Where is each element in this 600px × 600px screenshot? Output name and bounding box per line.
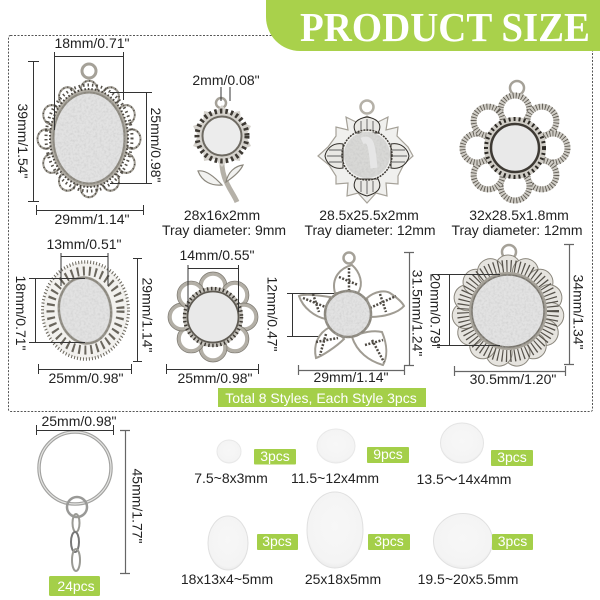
pendant 6 dimensions: 14mm/0.55": [179, 247, 255, 263]
cabochon 7.5~8x3mm: 7.5~8x3mm: [194, 470, 268, 486]
pendant 6 dimensions: 25mm/0.98": [177, 370, 253, 386]
cabochon 11.5~12x4mm: 11.5~12x4mm: [291, 470, 379, 486]
pendant 7: star flower: [299, 252, 404, 365]
pendant 5 dimensions: [13, 236, 156, 386]
cabochon 18x13x4~5mm: [181, 516, 298, 587]
pendant 4 labels: [452, 207, 582, 238]
cabochon 25x18x5mm: 3pcs: [374, 533, 404, 549]
pendant 6: eight petal flower: [168, 272, 258, 362]
cabochon 19.5~20x5.5mm: 19.5~20x5.5mm: [418, 571, 518, 587]
cabochon 19.5~20x5.5mm: [418, 514, 533, 587]
pendant 5 dimensions: 29mm/1.14": [140, 277, 156, 353]
pendant 5 dimensions: 25mm/0.98": [48, 370, 124, 386]
pendant 1 dimensions: [15, 35, 164, 227]
pendant 2 labels: Tray diameter: 9mm: [162, 222, 286, 238]
pendant 4 labels: Tray diameter: 12mm: [452, 222, 582, 238]
title banner: [266, 0, 600, 51]
cabochon 19.5~20x5.5mm: 3pcs: [498, 533, 527, 549]
pendant 7 dimensions: 29mm/1.14": [313, 369, 389, 385]
pendant 8: sunflower: [451, 245, 565, 368]
label: 24pcs: [49, 576, 100, 596]
title: PRODUCT SIZE: [300, 4, 590, 50]
pendant 8 dimensions: 34mm/1.34": [570, 274, 586, 350]
cabochon 11.5~12x4mm: [291, 429, 409, 486]
pendant 8 dimensions: [428, 244, 586, 387]
cabochon 18x13x4~5mm: 3pcs: [262, 533, 292, 549]
pendant 5: oval scalloped: [42, 262, 128, 359]
dashed frame: [8, 36, 592, 412]
cabochon 7.5~8x3mm: 3pcs: [260, 448, 290, 464]
key ring dimensions: 25mm/0.98": [41, 413, 117, 429]
cabochon 18x13x4~5mm: 18x13x4~5mm: [181, 571, 273, 587]
pendant 7 dimensions: [298, 252, 426, 385]
cabochon 25x18x5mm: [305, 492, 410, 587]
cabochon 25x18x5mm: 25x18x5mm: [305, 571, 381, 587]
cabochon 13.5~14x4mm: [417, 423, 533, 487]
pendant 2 labels: [162, 72, 286, 238]
label: 24pcs: 24pcs: [57, 578, 95, 594]
pendant 5 dimensions: 13mm/0.51": [46, 236, 122, 252]
key ring: [39, 432, 111, 571]
label: total styles: Total 8 Styles, Each Style 3pcs: [225, 390, 417, 406]
pendant 6 dimensions: [166, 247, 340, 386]
pendant 8 dimensions: 20mm/0.79": [428, 273, 444, 349]
key ring dimensions: 45mm/1.77": [130, 468, 146, 544]
pendant 2: sun flower: [193, 98, 251, 202]
pendant 4 labels: 32x28.5x1.8mm: [469, 207, 569, 223]
pendant 8 dimensions: 30.5mm/1.20": [470, 371, 556, 387]
pendant 5 dimensions: 18mm/0.71": [13, 275, 29, 351]
cabochon 13.5~14x4mm: 13.5〜14x4mm: [417, 471, 511, 487]
pendant 2 labels: 2mm/0.08": [192, 72, 260, 88]
key ring dimensions: [36, 413, 146, 574]
pendant 1 dimensions: 39mm/1.54": [15, 103, 31, 179]
pendant 3: diamond flower: [318, 100, 413, 203]
pendant 3 labels: [304, 207, 436, 238]
cabochon 11.5~12x4mm: 9pcs: [373, 446, 403, 462]
pendant 1 dimensions: 25mm/0.98": [148, 107, 164, 183]
cabochon 13.5~14x4mm: 3pcs: [497, 449, 527, 465]
pendant 4: eight ring flower: [462, 81, 568, 200]
pendant 1 dimensions: 29mm/1.14": [54, 211, 130, 227]
pendant 3 labels: Tray diameter: 12mm: [304, 222, 436, 238]
cabochon 7.5~8x3mm: [194, 440, 296, 486]
pendant 1 dimensions: 18mm/0.71": [54, 35, 130, 51]
pendant 3 labels: 28.5x25.5x2mm: [319, 207, 419, 223]
pendant 7 dimensions: 31.5mm/1.24": [410, 270, 426, 356]
pendant 6 dimensions: 12mm/0.47": [264, 276, 280, 352]
pendant 2 labels: 28x16x2mm: [184, 207, 260, 223]
pendant 1: oval lace: [38, 64, 140, 197]
